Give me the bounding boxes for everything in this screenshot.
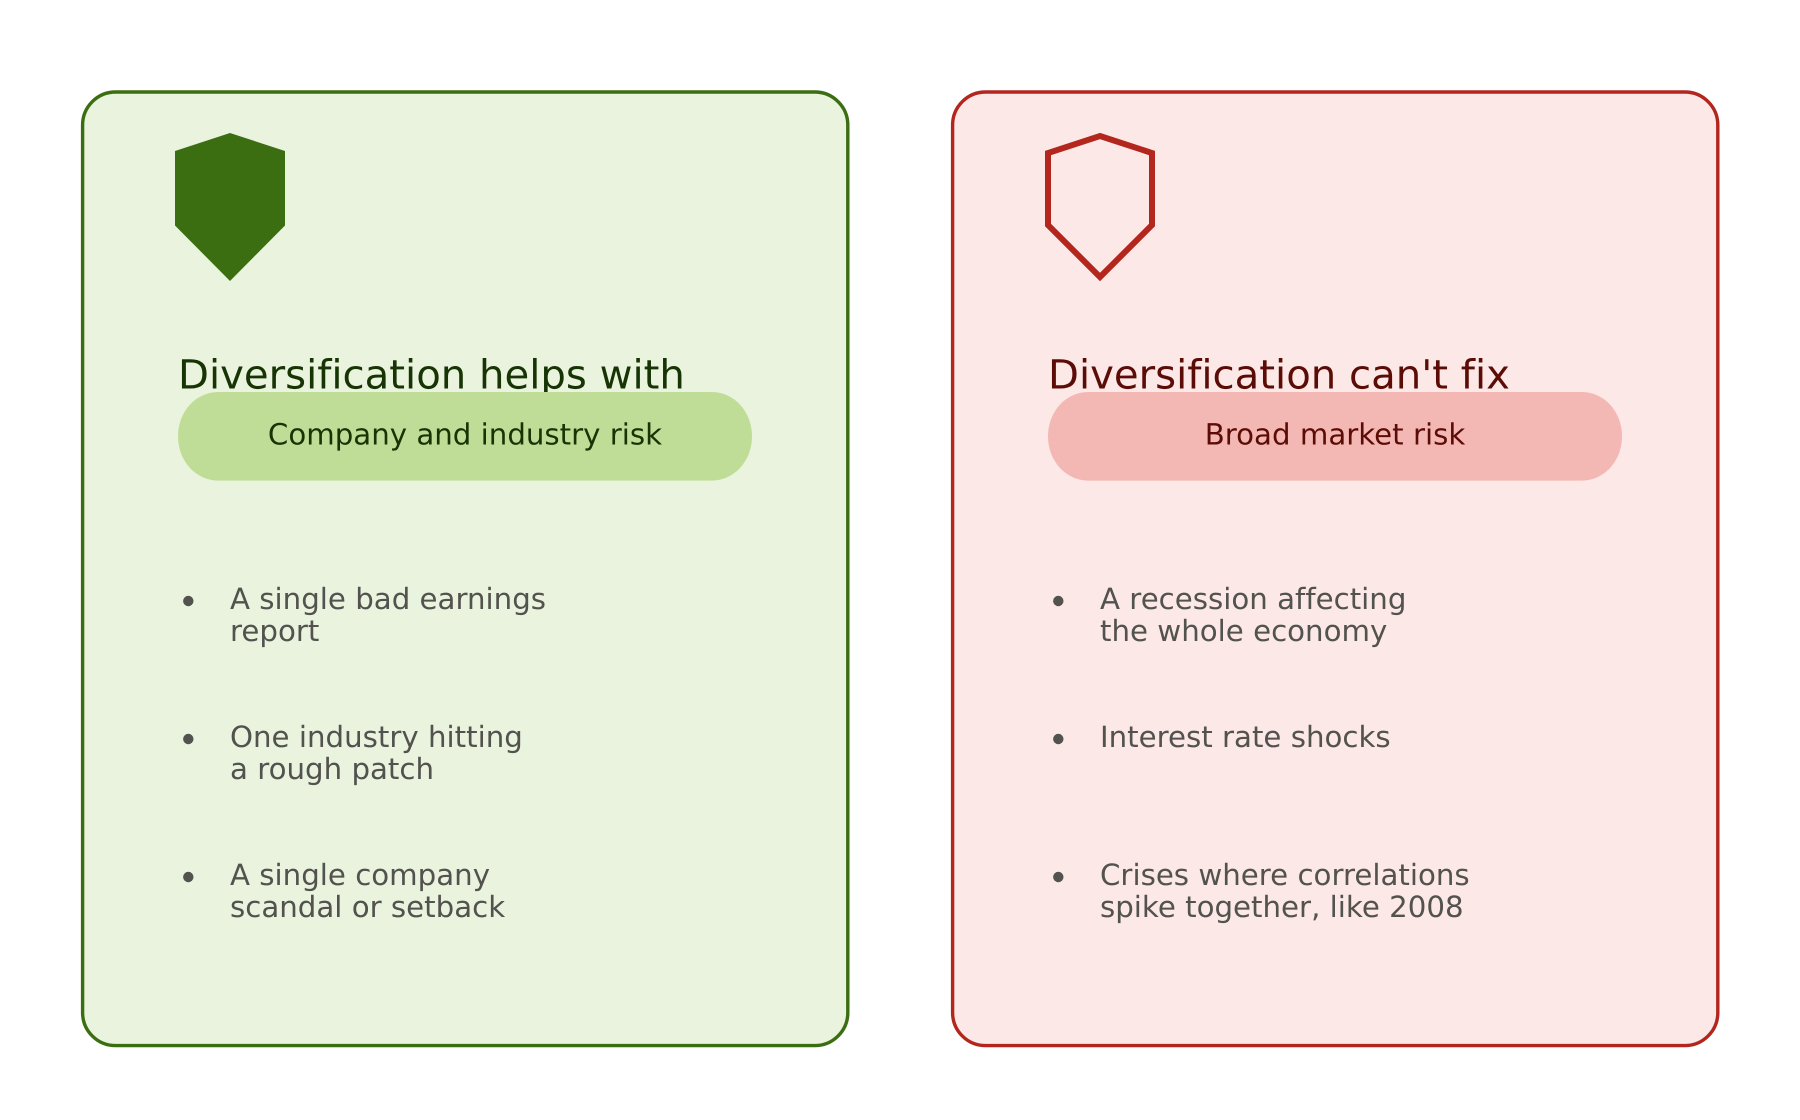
icon: solid green shield (175, 133, 285, 281)
pill: company and industry risk (178, 392, 752, 481)
pill: broad market risk: Broad market risk (1205, 418, 1465, 452)
heading: can't fix: Diversification can't fix (1048, 352, 1510, 398)
bullet: industry rough patch (183, 720, 523, 786)
bullet: crises: Crises where correlations (1100, 858, 1470, 892)
panel background: green card (83, 92, 848, 1046)
heading: helps with: Diversification helps with (178, 352, 685, 398)
pill: company and industry risk: Company and industry risk (268, 418, 662, 452)
panel: diversification can't fix (953, 92, 1718, 1046)
panel: diversification helps with (83, 92, 848, 1046)
bullet: recession: A recession affecting (1100, 582, 1406, 616)
bullet: interest rate shocks: Interest rate shocks (1100, 720, 1391, 754)
icon: outlined red shield (1048, 136, 1152, 277)
panel background: red card (953, 92, 1718, 1046)
pill: broad market risk (1048, 392, 1622, 481)
bullet: recession: the whole economy (1100, 614, 1387, 648)
bullet: recession (1053, 582, 1406, 648)
bullet: company scandal (183, 858, 505, 924)
bullet: bad earnings: report (230, 614, 319, 648)
bullet: bad earnings: A single bad earnings (230, 582, 546, 616)
bullet: crises: spike together, like 2008 (1100, 890, 1464, 924)
bullet: company scandal: scandal or setback (230, 890, 505, 924)
bullet: industry rough patch: a rough patch (230, 752, 434, 786)
bullet: industry rough patch: One industry hitting (230, 720, 523, 754)
bullet: bad earnings (183, 582, 546, 648)
bullet: crises (1053, 858, 1470, 924)
bullet: company scandal: A single company (230, 858, 490, 892)
